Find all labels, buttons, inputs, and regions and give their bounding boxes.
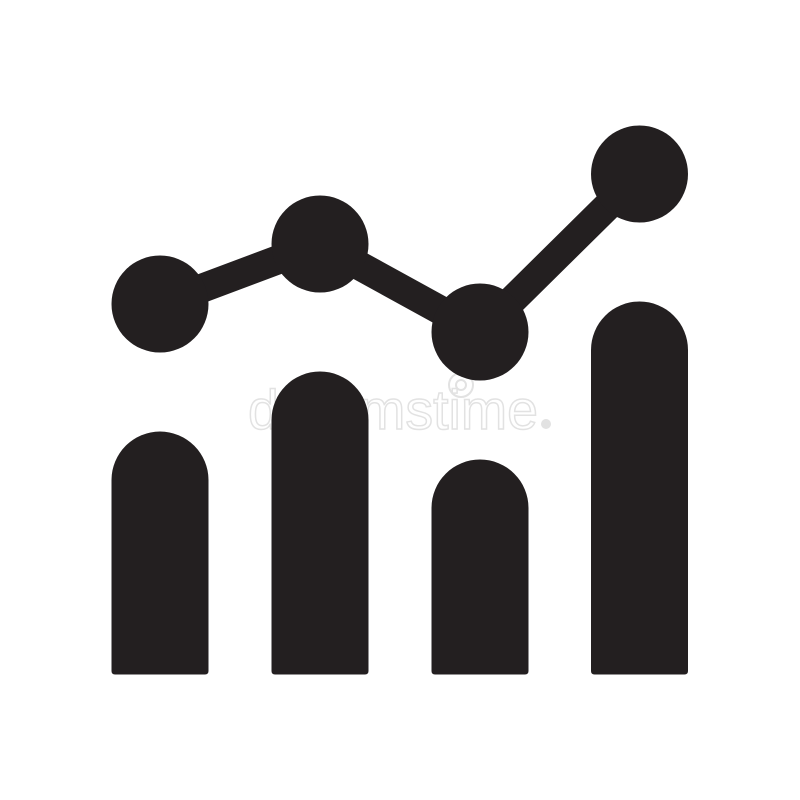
line connecting data points — [160, 174, 640, 332]
data point 4 — [591, 126, 688, 222]
bar 1 — [112, 432, 208, 674]
bar 2 — [272, 372, 368, 674]
data point 3 — [432, 284, 528, 380]
watermark: dreamstime — [248, 378, 538, 441]
data point 1 — [112, 256, 208, 352]
bar 3 — [431, 460, 528, 674]
bar 4 — [591, 302, 688, 674]
data point 2 — [272, 196, 368, 292]
